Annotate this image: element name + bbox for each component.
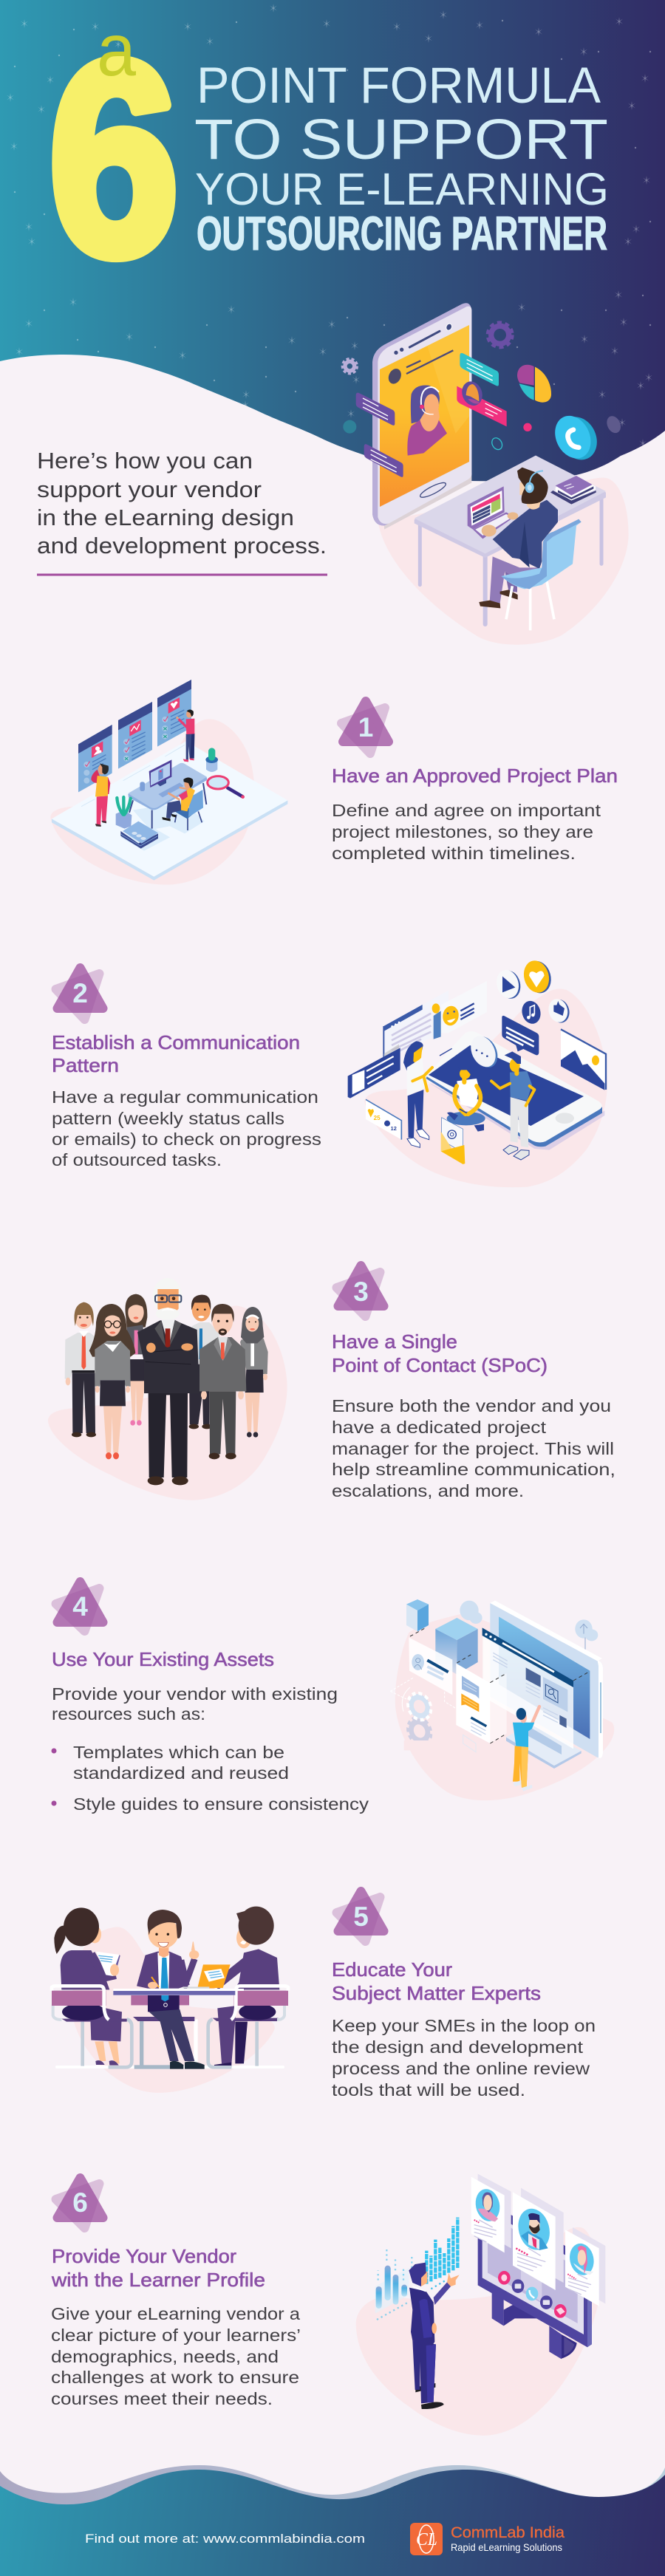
body 2: Have a regular communication	[52, 1087, 318, 1107]
intro text: Here’s how you can	[37, 448, 253, 474]
right man	[208, 1907, 288, 2067]
likes card	[366, 1099, 401, 1140]
badge 1: 1	[358, 712, 373, 742]
table	[113, 1989, 244, 1995]
step 4	[52, 1582, 614, 1814]
profile card left	[471, 2174, 511, 2252]
body 3: manager for the project. This will	[332, 1439, 614, 1458]
heading 2: Establish a Communication	[52, 1031, 300, 1053]
heading 4: Use Your Existing Assets	[52, 1648, 274, 1670]
body 6: demographics, needs, and	[51, 2347, 279, 2366]
body 1	[332, 801, 601, 863]
rear right man	[189, 1295, 219, 1429]
monitor stand	[492, 2292, 577, 2359]
heading 5	[332, 1958, 541, 2004]
dashed guide lines	[410, 1628, 590, 1743]
body 1: completed within timelines.	[332, 844, 576, 863]
title text: YOUR E-LEARNING	[195, 164, 609, 214]
central senior man	[137, 1278, 200, 1485]
badge 3: 3	[353, 1277, 369, 1307]
magnifier	[208, 776, 245, 799]
likes card: 12	[391, 1125, 397, 1132]
body 3: help streamline communication,	[332, 1460, 615, 1479]
gear	[390, 1678, 456, 1750]
book stack	[120, 821, 158, 849]
illustration: meeting at table	[52, 1907, 288, 2093]
person standing left	[91, 763, 110, 827]
photo card	[561, 1029, 606, 1090]
step 2	[52, 957, 607, 1187]
body 5: Keep your SMEs in the loop on	[332, 2016, 596, 2035]
speech bubble dots	[466, 1032, 502, 1071]
badge 2	[56, 968, 103, 1019]
badge 3	[337, 1265, 384, 1316]
profile card	[409, 1638, 452, 1695]
message card	[348, 1048, 400, 1099]
hijab woman	[240, 1307, 268, 1438]
icon: phone call	[548, 410, 604, 466]
tall chat card	[456, 1664, 507, 1752]
woman with glasses	[89, 1304, 135, 1459]
badge 5	[337, 1891, 384, 1941]
goatee man	[200, 1304, 246, 1459]
floor	[52, 741, 287, 881]
illustration: learner profile	[356, 2174, 605, 2436]
envelope	[441, 1118, 465, 1164]
step 3	[48, 1265, 615, 1500]
badge 5: 5	[353, 1902, 369, 1932]
person at screen	[513, 1706, 539, 1791]
body 2: pattern (weekly status calls	[52, 1109, 284, 1128]
footer wave back	[0, 2465, 665, 2576]
body 6: Give your eLearning vendor a	[51, 2304, 300, 2323]
seated man	[447, 1065, 485, 1132]
blue box	[435, 1618, 478, 1675]
body 4	[52, 1684, 338, 1723]
illustration: communication	[348, 957, 607, 1187]
bullet list: standardized and reused	[73, 1763, 289, 1783]
body 4: Provide your vendor with existing	[52, 1684, 338, 1704]
rear woman	[125, 1294, 147, 1426]
bar charts	[375, 2218, 457, 2320]
pie chart	[517, 365, 551, 403]
app buttons	[498, 2271, 567, 2318]
badge 4	[56, 1582, 103, 1631]
translucent browser window	[482, 1627, 573, 1749]
logo: CommLab India	[410, 2523, 565, 2555]
body 2: or emails) to check on progress	[52, 1130, 321, 1149]
heading 3: Point of Contact (SPoC)	[332, 1354, 548, 1376]
logo: CommLab India: Rapid eLearning Solutions	[451, 2541, 562, 2553]
social icons	[494, 957, 572, 1026]
body 5: the design and development	[332, 2037, 584, 2057]
body 3	[332, 1396, 615, 1500]
woman	[403, 1041, 432, 1147]
emoji card	[432, 981, 487, 1033]
body 6: courses meet their needs.	[51, 2389, 273, 2408]
heading 6: Provide Your Vendor	[52, 2245, 236, 2267]
cube	[406, 1599, 429, 1631]
browser card	[383, 991, 449, 1062]
bullet list: Style guides to ensure consistency	[73, 1794, 369, 1814]
badge 2: 2	[72, 978, 88, 1008]
badge 6: 6	[72, 2187, 88, 2218]
footer wave front	[0, 2470, 665, 2576]
body 6: challenges at work to ensure	[51, 2368, 299, 2387]
footer	[0, 2465, 665, 2576]
heading 2: Pattern	[52, 1054, 119, 1076]
white wave	[0, 355, 665, 665]
body 5: tools that will be used.	[332, 2080, 525, 2100]
step 1	[50, 680, 618, 884]
illustration: hero phone and desk	[342, 303, 629, 645]
step 5	[52, 1891, 596, 2100]
wall panels	[78, 680, 191, 792]
body 2: of outsourced tasks.	[52, 1150, 222, 1169]
profile card right	[565, 2227, 605, 2306]
logo: CommLab India: CommLab India	[451, 2524, 565, 2541]
phone	[372, 303, 471, 530]
ground line	[55, 2066, 284, 2068]
body 1: Define and agree on important	[332, 801, 601, 820]
icon: gears	[342, 323, 512, 434]
laptop	[468, 486, 515, 539]
body 6: clear picture of your learners’	[51, 2326, 301, 2345]
man at desk	[479, 468, 558, 608]
title text: POINT FORMULA	[197, 57, 601, 114]
intro text: in the eLearning design	[37, 505, 294, 530]
person seated with chair	[162, 777, 203, 830]
left woman	[52, 1907, 132, 2067]
body 3: escalations, and more.	[332, 1481, 524, 1500]
body 5	[332, 2016, 596, 2100]
body 5: process and the online review	[332, 2059, 590, 2078]
man in white shirt	[65, 1302, 98, 1437]
badge 1	[341, 701, 389, 754]
heading 1: Have an Approved Project Plan	[332, 765, 618, 787]
blue message bubble	[502, 1016, 539, 1055]
title text	[194, 57, 609, 260]
heading 5: Educate Your	[332, 1958, 452, 1981]
body 3: Ensure both the vendor and you	[332, 1396, 611, 1415]
body 1: project milestones, so they are	[332, 822, 593, 841]
intro text: support your vendor	[37, 476, 262, 502]
desk and monitor	[128, 759, 207, 829]
chair	[501, 519, 582, 630]
monitor	[490, 1601, 603, 1769]
cactus pot	[205, 748, 218, 772]
books	[550, 476, 596, 505]
heading 2	[52, 1031, 300, 1076]
badge 4: 4	[72, 1591, 88, 1622]
logo: CommLab India: CL	[416, 2530, 437, 2549]
likes card: 25	[374, 1115, 381, 1121]
header background	[0, 0, 665, 488]
clouds	[460, 1601, 598, 1653]
middle man	[131, 1910, 205, 2069]
body 6	[51, 2304, 301, 2408]
step 6	[51, 2174, 605, 2436]
heading 6: with the Learner Profile	[51, 2269, 265, 2291]
illustration: project plan workspace	[50, 680, 287, 884]
illustration: reusable assets	[390, 1599, 614, 1800]
agent on screen	[407, 385, 447, 456]
bullet list	[52, 1743, 369, 1814]
laptop and paper	[183, 1964, 231, 1989]
title text: TO SUPPORT	[194, 108, 608, 171]
man pointing	[409, 2263, 460, 2409]
heading 3	[332, 1330, 548, 1376]
phone lying flat	[426, 1031, 604, 1150]
illustration: team of people	[48, 1278, 287, 1500]
title: big yellow 6: 6	[49, 4, 179, 312]
heading 5: Subject Matter Experts	[332, 1982, 541, 2004]
title: small a: a	[97, 9, 136, 92]
heading 3: Have a Single	[332, 1330, 457, 1353]
person standing right	[176, 709, 194, 762]
bullet list: Templates which can be	[73, 1743, 284, 1762]
badge 6	[56, 2178, 103, 2228]
body 4: resources such as:	[52, 1704, 205, 1723]
profile card centre	[513, 2188, 564, 2290]
intro text: and development process.	[37, 533, 327, 558]
decorative dots and ring	[490, 414, 624, 451]
monitor	[478, 2196, 592, 2347]
desk	[415, 456, 606, 624]
chat bubbles	[356, 353, 507, 477]
body 2	[52, 1087, 321, 1169]
standing man	[487, 1051, 534, 1160]
intro text	[37, 448, 327, 576]
footer text: Find out more at: www.commlabindia.com	[85, 2532, 365, 2546]
heading 6	[51, 2245, 265, 2291]
plant	[116, 797, 132, 829]
body 3: have a dedicated project	[332, 1418, 547, 1437]
